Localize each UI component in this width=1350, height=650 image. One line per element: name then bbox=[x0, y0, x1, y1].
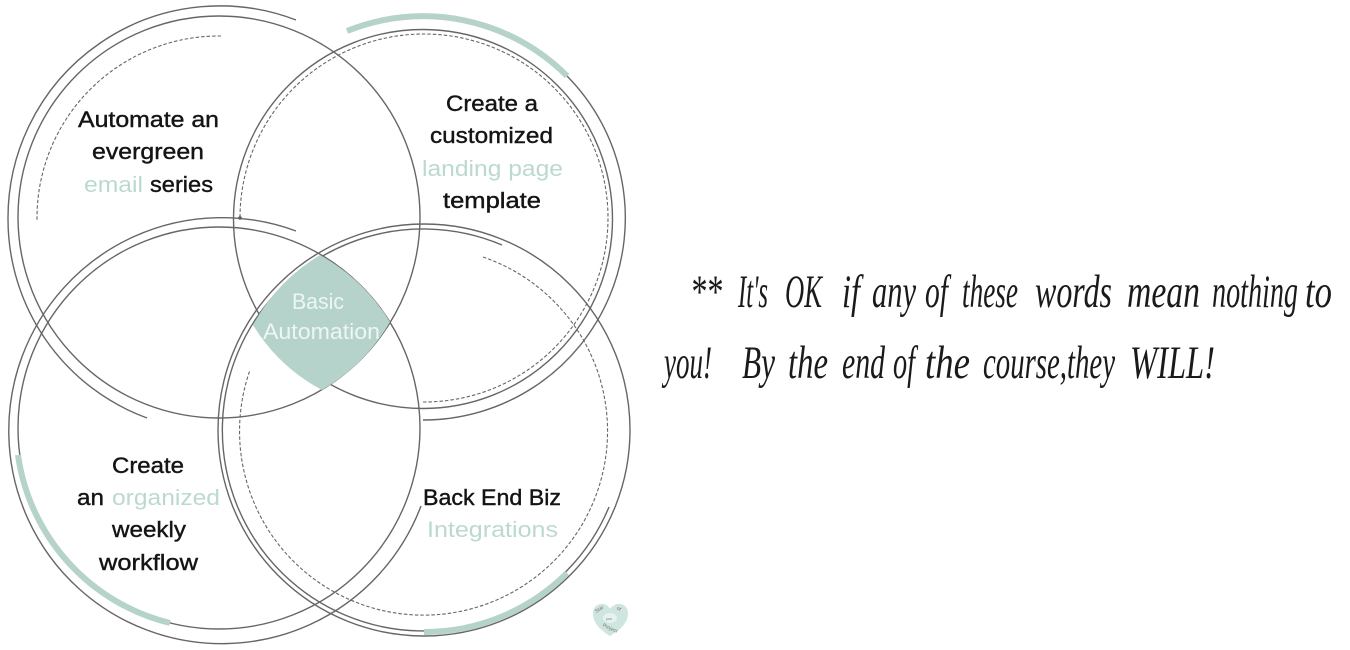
label: Automate an evergreen email series: series bbox=[150, 172, 213, 197]
icon: heart logo: Project bbox=[602, 623, 619, 635]
handwritten note: end bbox=[842, 338, 885, 389]
handwritten note bbox=[661, 267, 1332, 389]
handwritten note: to bbox=[1305, 267, 1332, 318]
handwritten note: mean bbox=[1127, 267, 1200, 318]
handwritten note: words bbox=[1035, 267, 1112, 318]
handwritten note: if bbox=[842, 267, 864, 318]
label: Back End Biz Integrations: Back End Biz bbox=[423, 485, 561, 510]
handwritten note: By bbox=[742, 338, 775, 389]
label: Create an organized weekly workflow: weekly bbox=[111, 517, 186, 542]
label: Create a customized landing page template: Create a bbox=[446, 91, 539, 116]
handwritten note: WILL! bbox=[1130, 338, 1215, 389]
label: Create an organized weekly workflow: organized bbox=[112, 485, 220, 510]
handwritten note: ** bbox=[690, 267, 722, 318]
handwritten note: OK bbox=[785, 267, 823, 318]
label: Automate an evergreen email series bbox=[78, 107, 219, 197]
circle: bottom right bbox=[218, 224, 630, 636]
circle: top left bbox=[8, 6, 420, 418]
handwritten note: any bbox=[872, 267, 916, 318]
label: Back End Biz Integrations bbox=[423, 485, 561, 542]
label: Create an organized weekly workflow: workflow bbox=[98, 550, 198, 575]
handwritten note: It's bbox=[737, 267, 768, 318]
handwritten note: the bbox=[925, 338, 970, 389]
circle: bottom left bbox=[9, 218, 421, 644]
label: Automate an evergreen email series: email bbox=[84, 172, 143, 197]
icon: heart logo bbox=[593, 604, 628, 636]
center overlap: Basic Automation bbox=[253, 255, 390, 390]
label: Create an organized weekly workflow: Create bbox=[112, 453, 184, 478]
icon: heart logo: of bbox=[615, 606, 622, 613]
handwritten note: the bbox=[788, 338, 828, 389]
label: Create a customized landing page template: customized bbox=[430, 123, 553, 148]
label: Create a customized landing page template bbox=[422, 91, 563, 213]
icon: heart logo: Star bbox=[594, 604, 605, 615]
label: Create a customized landing page template: template bbox=[443, 188, 541, 213]
handwritten note: you! bbox=[661, 338, 712, 389]
handwritten note: nothing bbox=[1212, 267, 1298, 318]
icon: heart logo: you bbox=[606, 617, 612, 621]
handwritten note: course,they bbox=[983, 338, 1115, 389]
center overlap: Basic Automation: Automation bbox=[263, 319, 380, 344]
circle: top right bbox=[234, 16, 625, 420]
handwritten note: of bbox=[893, 338, 919, 389]
center overlap: Basic Automation: Basic bbox=[292, 289, 344, 314]
handwritten note: of bbox=[925, 267, 952, 318]
label: Automate an evergreen email series: evergreen bbox=[92, 139, 204, 164]
handwritten note: these bbox=[962, 267, 1018, 318]
label: Create a customized landing page template: landing page bbox=[422, 156, 563, 181]
label: Create an organized weekly workflow: an bbox=[77, 485, 104, 510]
label: Back End Biz Integrations: Integrations bbox=[427, 517, 558, 542]
label: Create an organized weekly workflow bbox=[77, 453, 220, 575]
label: Automate an evergreen email series: Automate an bbox=[78, 107, 219, 132]
